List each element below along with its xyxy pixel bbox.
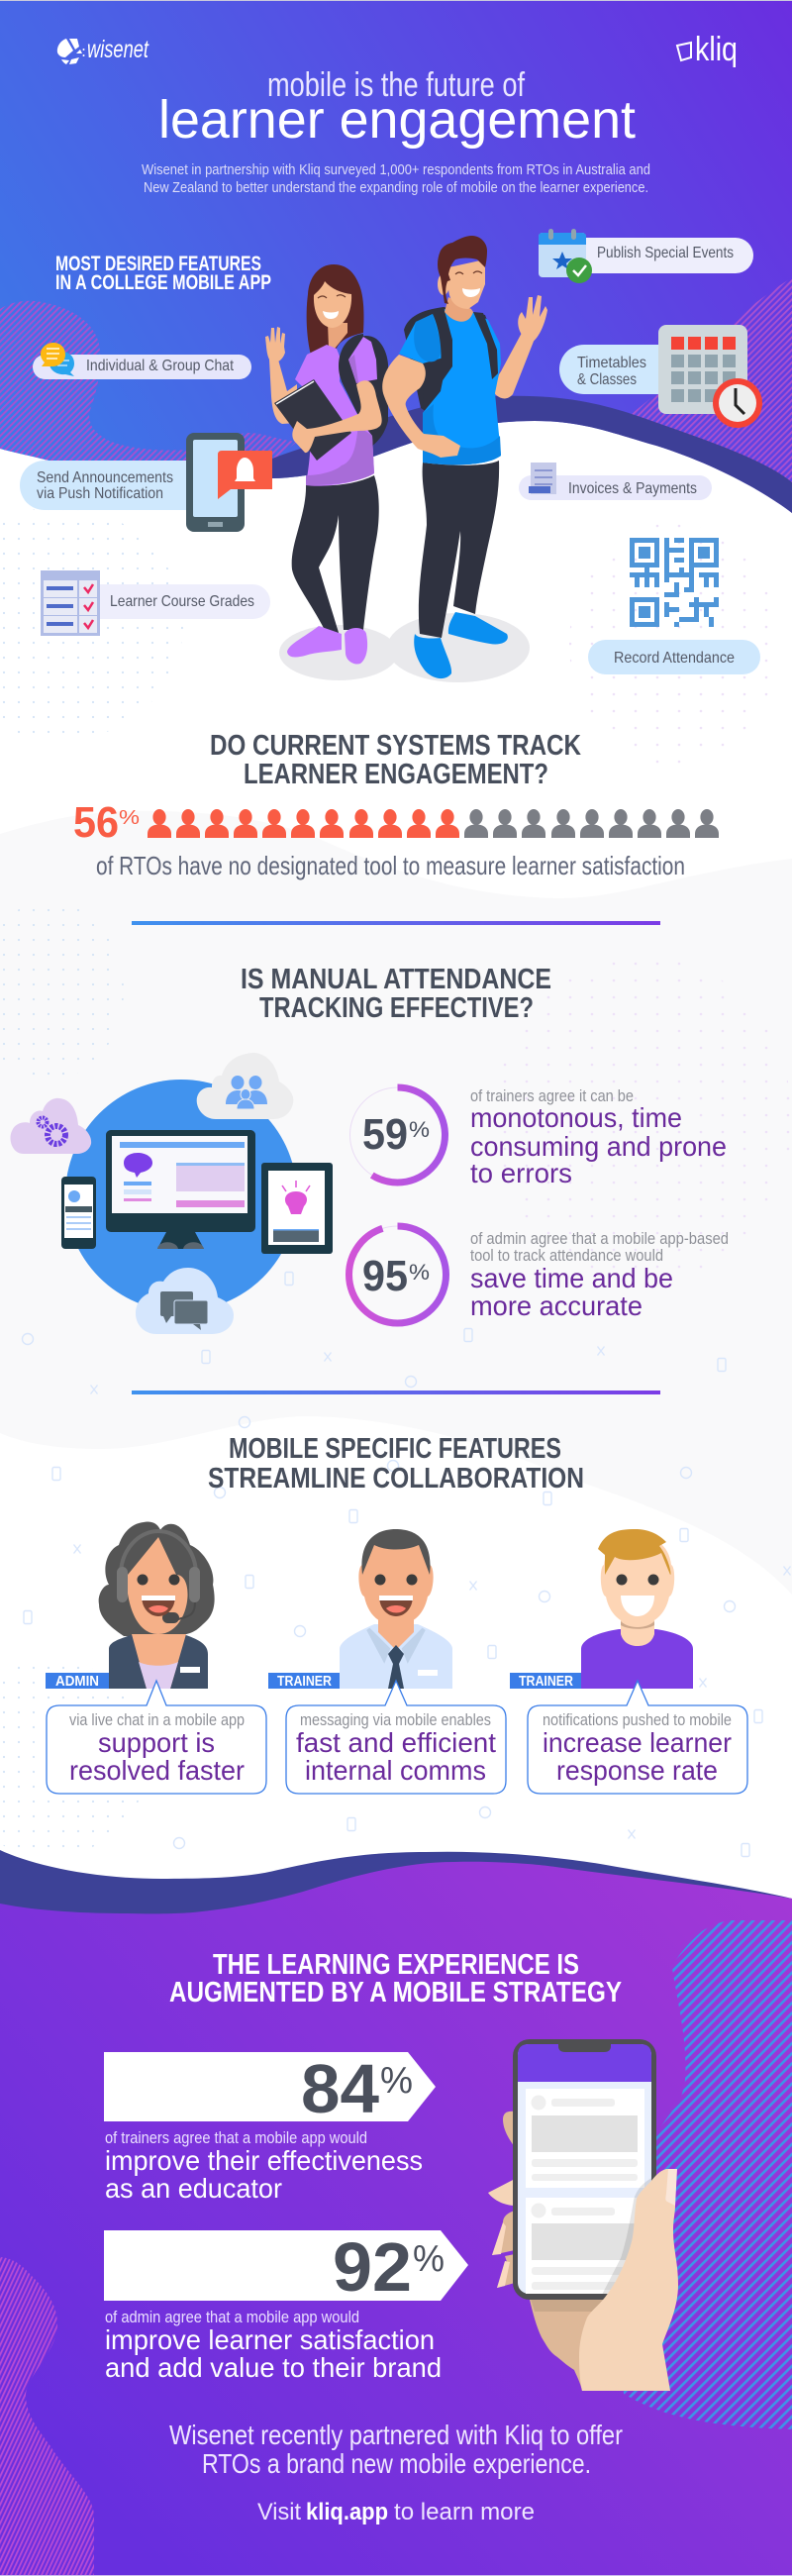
pictogram: 20 people: [148, 809, 719, 838]
man hand: [518, 295, 547, 342]
avatar: trainer in purple: [510, 1529, 693, 1690]
pill: [559, 345, 661, 394]
label: Learner Course Grades: [110, 593, 254, 610]
woman shirt: [295, 345, 374, 486]
illustration: devices and clouds: [10, 1053, 333, 1334]
woman backpack strap: [339, 334, 364, 409]
eyes and mouth: [137, 1575, 148, 1585]
woman shadow: [279, 625, 398, 680]
text: save time: save time and be: [470, 1263, 673, 1293]
dark wave band: [188, 396, 792, 513]
tag: admin: ADMIN: [55, 1673, 99, 1690]
banner: 92 percent: 92: [333, 2228, 412, 2306]
thumb and wrist: [579, 2169, 678, 2391]
woman hair: [307, 264, 364, 364]
neck: [621, 1614, 654, 1646]
heading: learning experience: THE LEARNING EXPERIENCE IS: [213, 1949, 579, 1981]
pill: [99, 584, 270, 619]
illustration: hand holding phone: [488, 2039, 678, 2391]
chart: 59 percent ring: 59: [362, 1110, 408, 1159]
text: improve satisfaction: and add value to their brand: [105, 2352, 442, 2383]
callout: increase learner: increase learner: [543, 1727, 732, 1758]
chart: 95 percent ring: [348, 1226, 446, 1323]
heading: do current systems track: LEARNER ENGAGEMENT?: [244, 759, 548, 790]
stripes: right blob: [629, 277, 792, 485]
closing text: [169, 2420, 623, 2525]
text: improve satisfaction: improve learner satisfaction: [105, 2324, 435, 2355]
callout: fast and efficient: fast and efficient: [296, 1727, 496, 1758]
feature: send announcements: [20, 433, 272, 532]
dark wave band: [0, 1850, 792, 1941]
body: [109, 1634, 208, 1689]
callout: support: [47, 1681, 266, 1794]
icon: notification bell: [218, 451, 272, 499]
heading: learning experience: AUGMENTED BY A MOBILE STRATEGY: [169, 1977, 622, 2009]
heading: most desired features: MOST DESIRED FEATURES: [55, 253, 261, 275]
phone screen: [518, 2044, 651, 2294]
intro paragraph: Wisenet in partnership with Kliq surveyed 1,000+ respondents from RTOs in Australia and: [142, 161, 650, 178]
banner: 84 percent: %: [380, 2060, 413, 2102]
heading: most desired features: IN A COLLEGE MOBILE APP: [55, 271, 271, 294]
banner: 84 percent: [104, 2050, 436, 2127]
chart: 95 percent ring: %: [409, 1260, 430, 1285]
pill: [588, 640, 760, 674]
blue circle: [65, 1080, 297, 1311]
woman arm over book: [292, 380, 382, 453]
label: Publish Special Events: [597, 245, 734, 261]
panel: footer background: [0, 1850, 792, 2576]
feature: timetables and classes: [559, 325, 762, 428]
chart: 59 percent ring: [350, 1087, 446, 1183]
illustration: woman: [265, 264, 398, 680]
man shoes: [448, 612, 508, 645]
label: Record Attendance: [614, 650, 735, 667]
closing text: kliq.app: [306, 2499, 388, 2525]
icon: phone: [186, 433, 245, 532]
closing text: to learn more: [394, 2499, 535, 2525]
icon: invoice: [529, 463, 556, 494]
woman backpack: [340, 336, 388, 452]
heading: mobile specific features: MOBILE SPECIFIC FEATURES: [229, 1433, 561, 1465]
tag: trainer: TRAINER: [519, 1673, 573, 1690]
stat: 56 percent: 56: [73, 798, 119, 847]
intro paragraph: [142, 161, 650, 196]
text: improve effectiveness: as an educator: [105, 2173, 282, 2204]
icon: qr code: [630, 538, 719, 627]
man smile: [462, 288, 480, 297]
heading: manual attendance: TRACKING EFFECTIVE?: [259, 992, 534, 1024]
pill: [33, 355, 251, 379]
headset: [121, 1531, 196, 1575]
avatar: trainer with tie: [268, 1529, 452, 1690]
wordmark: wisenet: [87, 36, 149, 63]
thumb nail: [665, 2169, 677, 2206]
heading: most desired features: [55, 253, 271, 294]
panel: header background: [0, 0, 792, 513]
woman shoulder: [348, 337, 377, 383]
divider: [132, 921, 660, 925]
finger 3: [492, 2211, 515, 2255]
icon: chat bubbles: [41, 343, 74, 376]
background: grey wave: [0, 811, 792, 1595]
woman smile: [323, 311, 339, 319]
finger 4: [497, 2254, 515, 2288]
background: dot fields: [0, 507, 792, 1857]
banner: 92 percent: [104, 2228, 468, 2306]
text: improve effectiveness: of trainers agree that a mobile app would: [105, 2128, 367, 2147]
man left arm: [382, 355, 460, 458]
tablet: [261, 1163, 333, 1254]
tie: [388, 1645, 404, 1689]
label: Send Announcements: [37, 469, 173, 486]
body: [581, 1629, 693, 1689]
heading: do current systems track: DO CURRENT SYSTEMS TRACK: [210, 730, 581, 762]
feature: learner course grades: [41, 570, 270, 636]
text: improve satisfaction: of admin agree that a mobile app would: [105, 2308, 359, 2326]
label: Timetables: [577, 355, 646, 371]
eyes and mouth: [374, 1575, 386, 1585]
man raised arm: [494, 333, 535, 398]
callout: support: support is: [98, 1727, 215, 1758]
man shirt: [399, 309, 501, 464]
hair: [99, 1522, 215, 1636]
card 1: [526, 2089, 644, 2188]
man head: [448, 259, 485, 309]
hair: [598, 1529, 671, 1575]
callout: increase learner: notifications pushed to mobile: [543, 1710, 732, 1729]
text: save time: of admin agree that a mobile app-based: [470, 1229, 729, 1248]
woman book: [274, 379, 351, 461]
banner: 92 percent: %: [413, 2238, 445, 2280]
head: [358, 1535, 434, 1625]
text: improve satisfaction: [105, 2308, 442, 2383]
feature: send announcements: via Push Notification: [37, 485, 163, 502]
label: Invoices & Payments: [568, 480, 697, 497]
woman raised arm: [269, 360, 297, 424]
stripes: right blob: [622, 1920, 792, 2429]
feature: individual and group chat: [33, 343, 251, 379]
callout: fast and efficient: internal comms: [305, 1755, 486, 1786]
phone frame: [513, 2039, 656, 2300]
heading: manual attendance: IS MANUAL ATTENDANCE: [241, 964, 551, 995]
feature: timetables and classes: & Classes: [577, 371, 637, 388]
illustration: man: [382, 236, 547, 682]
text: improve effectiveness: [105, 2128, 423, 2204]
finger 2: [488, 2179, 515, 2206]
thumb shadow: [602, 2176, 656, 2300]
divider: [132, 1391, 660, 1394]
purple area: [0, 1862, 792, 2576]
callout: increase learner: response rate: [556, 1755, 718, 1786]
text: save time: [470, 1229, 729, 1321]
palm: [530, 2296, 609, 2391]
small phone: [61, 1177, 96, 1249]
tag: trainer: TRAINER: [277, 1673, 332, 1690]
bottom edge: [0, 2575, 792, 2576]
pill: [20, 461, 188, 510]
icon: tv mark: [677, 43, 691, 60]
text: improve effectiveness: improve their effectiveness: [105, 2145, 423, 2176]
pill: [519, 475, 712, 500]
man neck: [445, 297, 473, 322]
text: monotonous: consuming and prone: [470, 1131, 727, 1162]
chart: 95 percent ring: 95: [362, 1252, 408, 1300]
chart: 59 percent ring: %: [409, 1117, 430, 1142]
woman neck: [328, 323, 347, 349]
feature: publish special events: [539, 229, 753, 283]
neck: [378, 1614, 414, 1650]
phone notch: [558, 2043, 611, 2052]
stat: 56 percent: %: [119, 807, 140, 829]
text: monotonous: of trainers agree it can be: [470, 1086, 634, 1105]
face: [127, 1537, 188, 1634]
woman shoes: [287, 626, 342, 657]
callout: increase learner: [528, 1681, 747, 1794]
text: monotonous: to errors: [470, 1158, 572, 1188]
callout: fast and efficient: [286, 1681, 506, 1794]
banner: 84 percent: 84: [301, 2050, 379, 2127]
man ear: [438, 273, 449, 295]
pill: [550, 238, 753, 273]
man leggings: [419, 461, 499, 638]
head: [601, 1535, 674, 1625]
card 2: [526, 2198, 644, 2294]
background: doodles: [22, 1272, 790, 1856]
title: learner engagement: [158, 90, 636, 150]
heading: mobile specific features: [208, 1433, 584, 1494]
body: [340, 1624, 452, 1689]
text: monotonous: [470, 1086, 727, 1188]
heading: learning experience: [169, 1949, 622, 2009]
label: Individual & Group Chat: [86, 358, 234, 374]
man straps: [423, 307, 452, 403]
callout: support: via live chat in a mobile app: [69, 1710, 245, 1729]
monitor: [106, 1130, 255, 1249]
hair: [361, 1529, 431, 1575]
closing text: RTOs a brand new mobile experience.: [202, 2448, 591, 2479]
icon: wisenet mark: [57, 39, 85, 64]
heading: mobile specific features: STREAMLINE COLLABORATION: [208, 1463, 584, 1494]
text: save time: more accurate: [470, 1290, 643, 1321]
icon: timetable: [658, 325, 747, 414]
cloud: people: [197, 1053, 293, 1119]
icon: calendar with check: [539, 229, 592, 283]
man backpack: [404, 307, 498, 416]
eyes and mouth: [616, 1575, 628, 1585]
avatar: admin: [46, 1522, 215, 1690]
text: monotonous: monotonous, time: [470, 1102, 682, 1133]
logo: kliq: [677, 31, 738, 68]
intro paragraph: New Zealand to better understand the expanding role of mobile on the learner experience.: [144, 179, 648, 196]
cloud: gears: [10, 1098, 91, 1154]
callout: support: resolved faster: [69, 1755, 245, 1786]
cloud: chat: [136, 1268, 234, 1334]
feature: record attendance: [588, 538, 760, 674]
logo: wisenet: [57, 36, 149, 64]
text: save time: tool to track attendance would: [470, 1246, 663, 1265]
woman leggings: [292, 475, 379, 636]
woman face: [314, 281, 351, 328]
man hair: [438, 236, 487, 304]
finger 1: [503, 2112, 515, 2147]
woman hand: [265, 327, 285, 362]
callout: fast and efficient: messaging via mobile enables: [300, 1710, 491, 1729]
icon: clock: [713, 378, 762, 428]
wordmark: kliq: [695, 31, 738, 68]
stripes: left blob: [0, 301, 297, 475]
heading: manual attendance: [241, 964, 551, 1024]
stripes: left blob: [0, 2257, 94, 2576]
icon: grade table: [41, 570, 100, 636]
heading: do current systems track: [210, 730, 581, 790]
man shadow: [387, 613, 530, 682]
feature: invoices and payments: [519, 463, 712, 500]
title: mobile is the future of: [267, 66, 525, 104]
closing text: Visit: [257, 2499, 301, 2525]
closing text: Wisenet recently partnered with Kliq to offer: [169, 2420, 623, 2450]
